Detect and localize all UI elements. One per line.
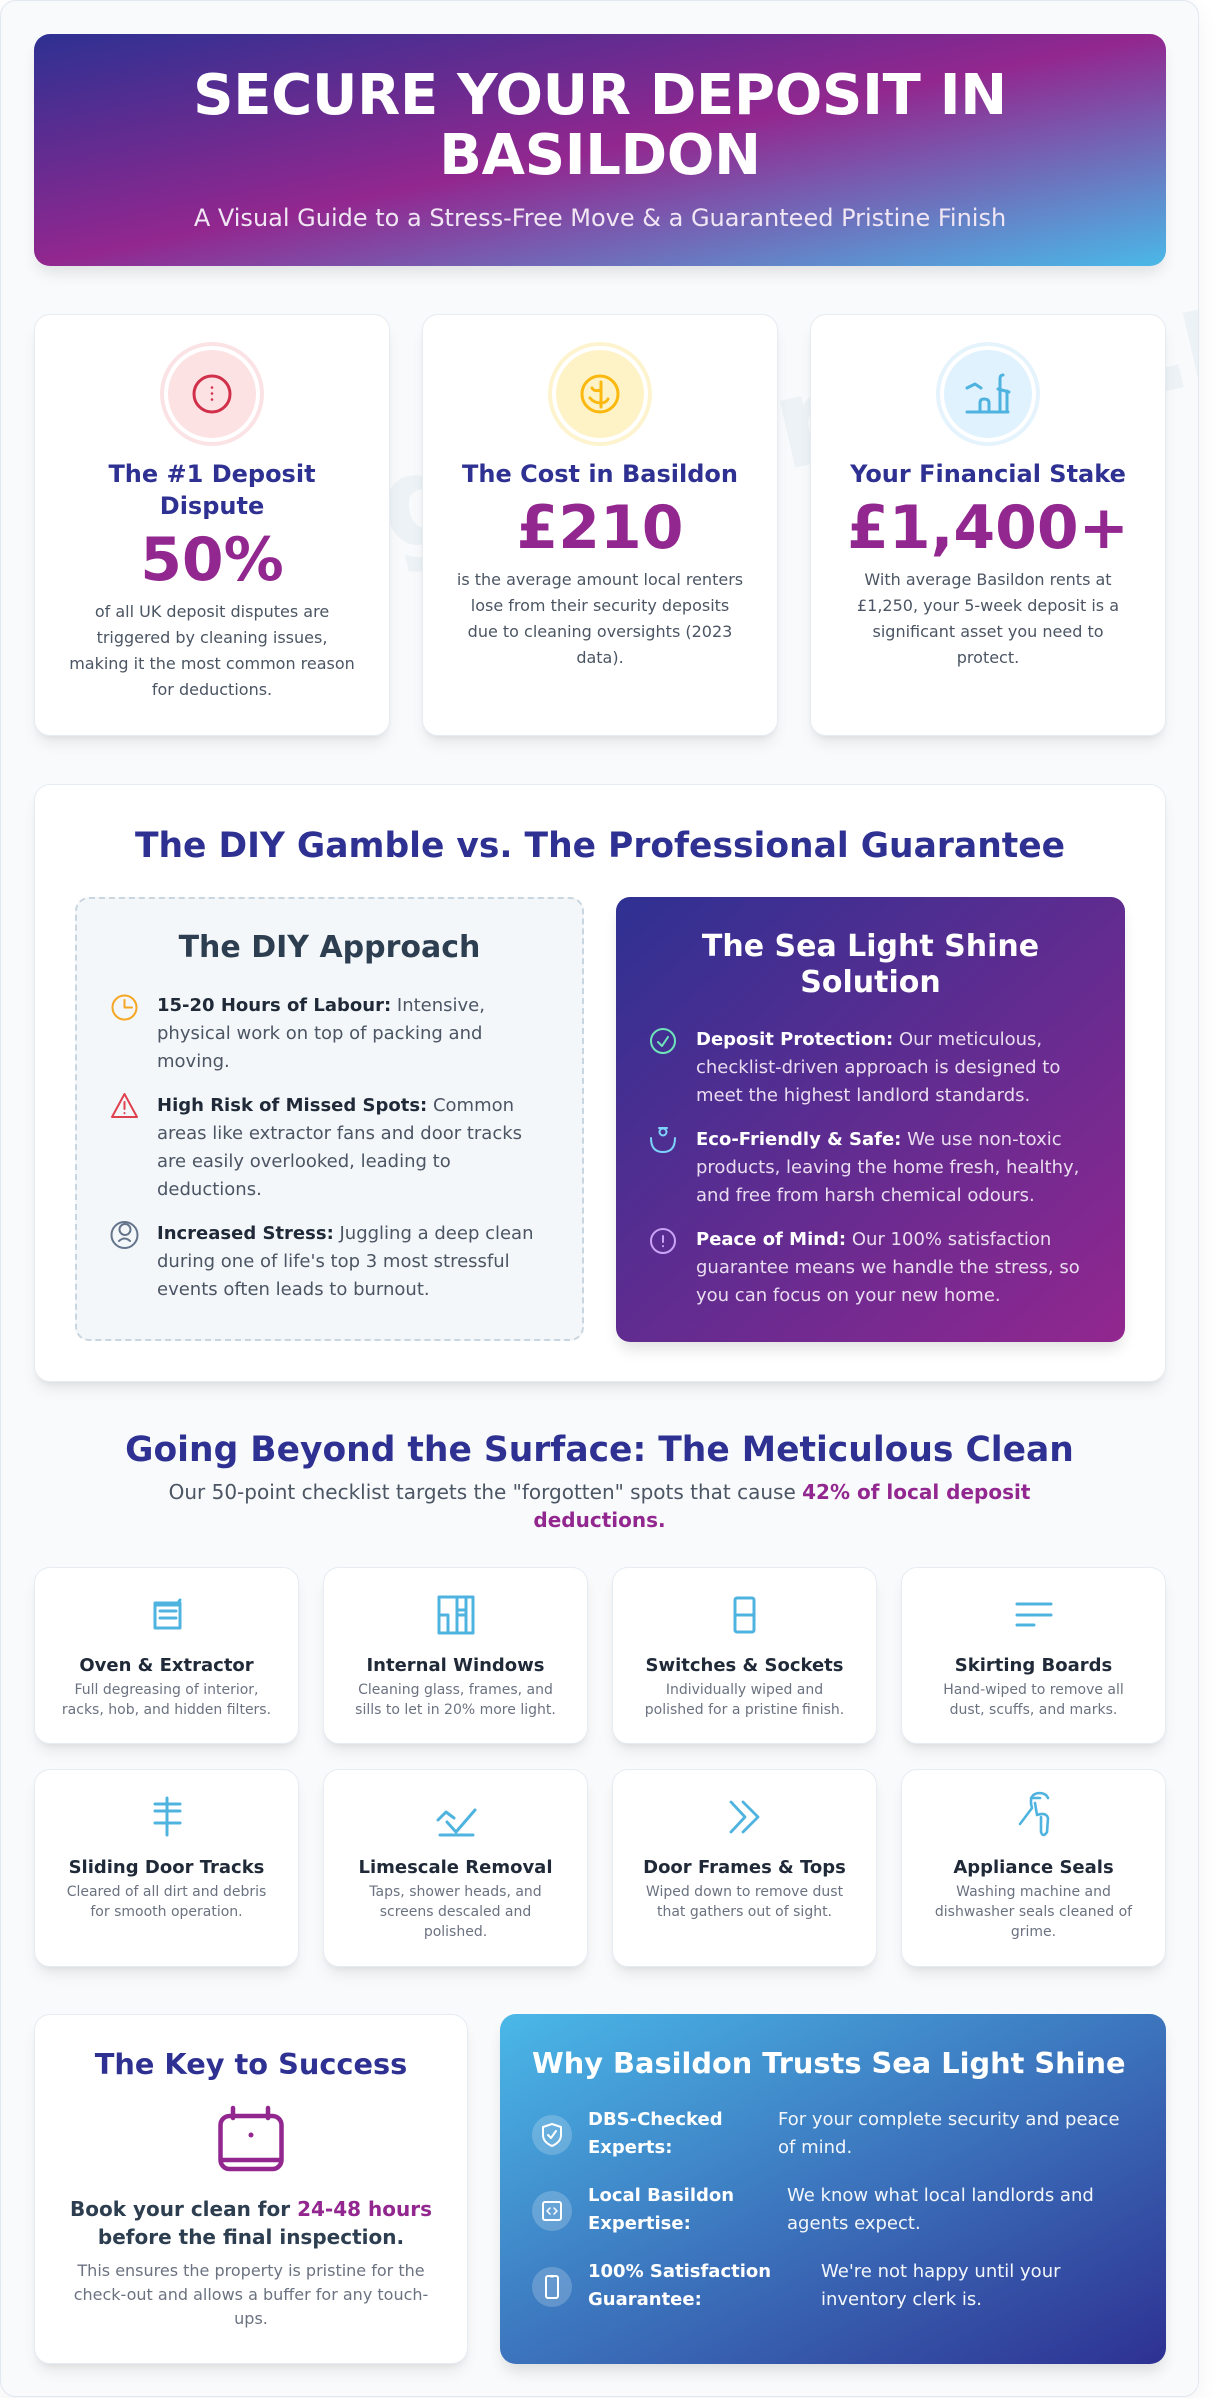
- description: [67, 1884, 266, 1920]
- label: [588, 2258, 771, 2314]
- stat text: due to cleaning oversights (2023: [468, 622, 732, 641]
- description: that gathers out of sight.: [657, 1904, 832, 1920]
- title: Oven & Extractor: [79, 1655, 254, 1676]
- call to action: [70, 2197, 432, 2249]
- label: Local Basildon: [588, 2185, 734, 2206]
- item: peace of mind: guarantee means we handle the stress, so: [696, 1257, 1080, 1278]
- icon: calendar: [218, 2106, 284, 2172]
- icon: check: [650, 1028, 676, 1054]
- item: missed spots: are easily overlooked, leading to: [157, 1151, 451, 1172]
- icon: oven: [154, 1598, 182, 1630]
- checklist card: tracks: [34, 1769, 299, 1967]
- checklist card: seals: [901, 1769, 1166, 1967]
- icon: clock: [112, 994, 138, 1020]
- stat text: significant asset you need to: [872, 622, 1104, 641]
- item: hours: 15-20 Hours of Labour: Intensive,: [157, 995, 485, 1016]
- solution heading: [702, 929, 1039, 1000]
- note: check-out and allows a buffer for any touch-: [74, 2285, 428, 2304]
- text: agents expect.: [787, 2213, 921, 2234]
- title: Sliding Door Tracks: [69, 1857, 264, 1878]
- title: Switches & Sockets: [645, 1655, 844, 1676]
- label: 100% Satisfaction: [588, 2261, 771, 2282]
- stat value: £210: [516, 493, 684, 563]
- description: screens descaled and: [380, 1904, 531, 1920]
- icon: stressed face: [110, 1221, 138, 1249]
- description: [935, 1884, 1132, 1940]
- item: deposit protection: meet the highest landlord standards.: [696, 1085, 1030, 1106]
- icon: alert circle: [168, 350, 256, 438]
- icon: lines: [1016, 1602, 1052, 1626]
- trust row: local: [532, 2191, 1132, 2251]
- section heading: The DIY Gamble vs. The Professional Guarantee: [135, 826, 1065, 866]
- text: For your complete security and peace: [778, 2109, 1120, 2130]
- solution heading: Solution: [800, 965, 941, 1000]
- subtitle: A Visual Guide to a Stress-Free Move & a Guaranteed Pristine Finish: [194, 204, 1006, 232]
- stat text: £1,250, your 5-week deposit is a: [857, 596, 1119, 615]
- icon: bar chart: [944, 350, 1032, 438]
- icon: money circle: [556, 350, 644, 438]
- stat heading: [108, 460, 316, 520]
- text: We know what local landlords and: [787, 2185, 1094, 2206]
- description: Wiped down to remove dust: [646, 1884, 843, 1900]
- panel: why Basildon trusts: [500, 2014, 1166, 2364]
- solution heading: The Sea Light Shine: [702, 929, 1039, 964]
- title: SECURE YOUR DEPOSIT IN: [193, 63, 1007, 128]
- icon: chevrons: [730, 1800, 760, 1834]
- label: Experts:: [588, 2137, 672, 2158]
- stat heading: Your Financial Stake: [850, 460, 1126, 488]
- stat text: triggered by cleaning issues,: [97, 628, 327, 647]
- label: [588, 2182, 734, 2238]
- description: Cleaning glass, frames, and: [358, 1682, 553, 1698]
- item: peace of mind: Peace of Mind: Our 100% satisfaction: [696, 1229, 1051, 1250]
- DIY heading: The DIY Approach: [179, 930, 480, 965]
- stat card: deposit dispute: [34, 314, 390, 736]
- panel: Sea Light Shine solution: [616, 897, 1125, 1342]
- icon: windows: [438, 1596, 474, 1634]
- item: deposit protection: [696, 1029, 1060, 1106]
- checklist card: door frames: [612, 1769, 877, 1967]
- label: Expertise:: [588, 2213, 691, 2234]
- text: We're not happy until your: [821, 2261, 1061, 2282]
- description: [646, 1884, 843, 1920]
- checklist card: switches: [612, 1567, 877, 1744]
- stat text: data).: [576, 648, 624, 667]
- icon: shield: [532, 2115, 572, 2155]
- note: This ensures the property is pristine for the: [77, 2261, 425, 2280]
- description: Hand-wiped to remove all: [943, 1682, 1124, 1698]
- heading: Why Basildon Trusts Sea Light Shine: [532, 2046, 1126, 2080]
- trust row: guarantee: [532, 2267, 1132, 2327]
- icon: exclamation: [650, 1228, 676, 1254]
- stat text: With average Basildon rents at: [864, 570, 1112, 589]
- stat text: protect.: [957, 648, 1019, 667]
- icon: warning: [111, 1093, 138, 1118]
- section intro: Our 50-point checklist targets the "forgotten" spots that cause 42% of local deposit: [169, 1480, 1030, 1504]
- item: stress: Increased Stress: Juggling a deep clean: [157, 1223, 534, 1244]
- description: dishwasher seals cleaned of: [935, 1904, 1132, 1920]
- checklist card: oven: [34, 1567, 299, 1744]
- item: deposit protection: checklist-driven approach is designed to: [696, 1057, 1060, 1078]
- note: ups.: [234, 2309, 268, 2328]
- stat card: cost in Basildon: [422, 314, 778, 736]
- section intro: [169, 1480, 1030, 1532]
- icon: seal: [1018, 1792, 1050, 1836]
- item: eco friendly: [696, 1129, 1079, 1206]
- stat value: £1,400+: [847, 493, 1129, 563]
- item: hours: [157, 995, 485, 1072]
- text: [821, 2258, 1061, 2314]
- watermark text: n: [759, 338, 878, 499]
- item: missed spots: deductions.: [157, 1179, 262, 1200]
- label: Guarantee:: [588, 2289, 702, 2310]
- stat heading: The #1 Deposit: [108, 460, 316, 488]
- description: Full degreasing of interior,: [74, 1682, 259, 1698]
- watermark text: g: [364, 420, 484, 581]
- title: Appliance Seals: [953, 1857, 1114, 1878]
- description: grime.: [1011, 1924, 1056, 1940]
- description: [369, 1884, 542, 1940]
- item: missed spots: [157, 1095, 522, 1200]
- title: Door Frames & Tops: [643, 1857, 846, 1878]
- icon: limescale: [436, 1808, 477, 1836]
- title: Limescale Removal: [358, 1857, 553, 1878]
- stat text: [457, 570, 743, 667]
- stat text: lose from their security deposits: [471, 596, 729, 615]
- text: of mind.: [778, 2137, 852, 2158]
- stat text: [69, 602, 355, 699]
- description: Taps, shower heads, and: [369, 1884, 542, 1900]
- item: deposit protection: Deposit Protection: Our meticulous,: [696, 1029, 1042, 1050]
- icon: phone: [532, 2267, 572, 2307]
- text: [787, 2182, 1094, 2238]
- description: Individually wiped and: [666, 1682, 823, 1698]
- item: missed spots: areas like extractor fans and door tracks: [157, 1123, 522, 1144]
- stat text: is the average amount local renters: [457, 570, 743, 589]
- note: [74, 2261, 428, 2328]
- call to action: Book your clean for 24-48 hours: [70, 2197, 432, 2221]
- description: [355, 1682, 556, 1718]
- description: racks, hob, and hidden filters.: [62, 1702, 271, 1718]
- description: [62, 1682, 271, 1718]
- item: eco friendly: Eco-Friendly & Safe: We use non-toxic: [696, 1129, 1062, 1150]
- description: sills to let in 20% more light.: [355, 1702, 556, 1718]
- item: stress: [157, 1223, 534, 1300]
- item: hours: moving.: [157, 1051, 230, 1072]
- heading: The Key to Success: [95, 2047, 407, 2081]
- description: dust, scuffs, and marks.: [950, 1702, 1117, 1718]
- title: BASILDON: [439, 123, 761, 188]
- text: [778, 2106, 1120, 2162]
- item: peace of mind: you can focus on your new home.: [696, 1285, 1001, 1306]
- description: polished.: [424, 1924, 487, 1940]
- title: Skirting Boards: [955, 1655, 1112, 1676]
- section heading: meticulous clean: Going Beyond the Surface: The Meticulous Clean: [125, 1430, 1074, 1470]
- icon: tracks: [154, 1796, 182, 1836]
- stat value: 50%: [140, 525, 284, 595]
- description: Washing machine and: [956, 1884, 1111, 1900]
- item: eco friendly: and free from harsh chemical odours.: [696, 1185, 1035, 1206]
- checklist card: windows: [323, 1567, 588, 1744]
- item: stress: events often leads to burnout.: [157, 1279, 430, 1300]
- description: for smooth operation.: [90, 1904, 243, 1920]
- icon: eco: [650, 1127, 676, 1153]
- item: eco friendly: products, leaving the home fresh, healthy,: [696, 1157, 1079, 1178]
- stat text: of all UK deposit disputes are: [95, 602, 329, 621]
- header banner: [34, 34, 1166, 266]
- item: hours: physical work on top of packing and: [157, 1023, 482, 1044]
- label: DBS-Checked: [588, 2109, 723, 2130]
- panel: DIY approach: [75, 897, 584, 1341]
- description: Cleared of all dirt and debris: [67, 1884, 266, 1900]
- section intro: deductions.: [533, 1508, 666, 1532]
- icon: code box: [532, 2191, 572, 2231]
- panel: DIY vs professional: [34, 784, 1166, 1382]
- item: stress: during one of life's top 3 most stressful: [157, 1251, 510, 1272]
- stat text: [857, 570, 1119, 667]
- stat heading: The Cost in Basildon: [462, 460, 738, 488]
- text: inventory clerk is.: [821, 2289, 982, 2310]
- title: Internal Windows: [366, 1655, 545, 1676]
- stat text: making it the most common reason: [69, 654, 355, 673]
- label: [588, 2109, 723, 2158]
- stat card: financial stake: [810, 314, 1166, 736]
- checklist card: skirting: [901, 1567, 1166, 1744]
- item: peace of mind: [696, 1229, 1080, 1306]
- panel: key to success: [34, 2014, 468, 2364]
- title: [193, 63, 1007, 188]
- description: polished for a pristine finish.: [645, 1702, 844, 1718]
- checklist card: limescale: [323, 1769, 588, 1967]
- description: [943, 1682, 1124, 1718]
- call to action: before the final inspection.: [98, 2225, 404, 2249]
- trust row: DBS: [532, 2109, 1120, 2158]
- item: missed spots: High Risk of Missed Spots: Common: [157, 1095, 514, 1116]
- description: [645, 1682, 844, 1718]
- stat text: for deductions.: [152, 680, 272, 699]
- icon: switch: [734, 1596, 756, 1634]
- stat heading: Dispute: [160, 492, 264, 520]
